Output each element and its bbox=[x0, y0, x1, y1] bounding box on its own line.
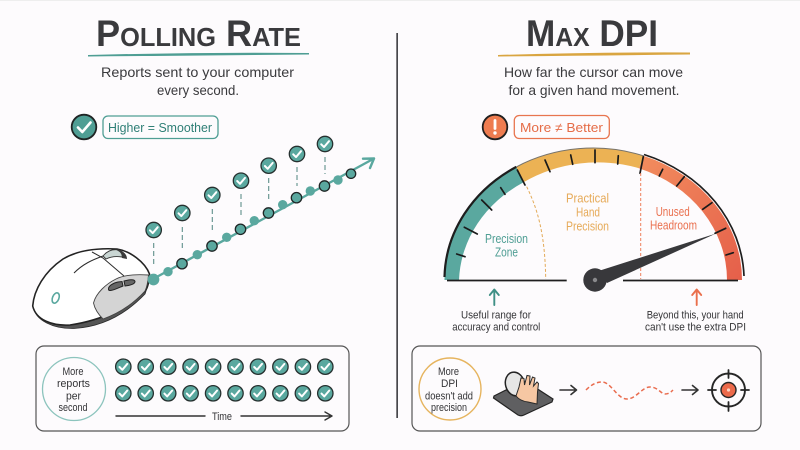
callout circle: doesn't add bbox=[425, 390, 473, 402]
subtitle: for a given hand movement. bbox=[508, 82, 680, 98]
needle bbox=[583, 234, 716, 292]
time arrow: Time bbox=[212, 411, 232, 423]
divider bbox=[396, 33, 398, 418]
trend line with arrow bbox=[153, 158, 374, 279]
label: Unused Headroom: Headroom bbox=[650, 218, 697, 232]
outer rim bbox=[444, 167, 516, 277]
title underline bbox=[498, 52, 690, 56]
title: Polling Rate: Polling Rate bbox=[96, 13, 301, 54]
label: Unused Headroom: Unused bbox=[656, 205, 690, 219]
label: Practical Hand Precision: Hand bbox=[576, 206, 600, 220]
small report dots bbox=[163, 175, 343, 276]
wavy cursor path bbox=[586, 382, 673, 399]
arrow: beyond range bbox=[692, 290, 701, 305]
callout circle bbox=[42, 358, 106, 420]
label: Practical Hand Precision: Practical bbox=[566, 192, 609, 206]
zone boundaries bbox=[527, 173, 641, 279]
label: Unused Headroom bbox=[650, 205, 697, 232]
subtitle bbox=[504, 64, 683, 98]
icon: target bbox=[708, 370, 749, 411]
badge: Higher = Smoother: Higher = Smoother bbox=[108, 120, 213, 135]
caption: useful range: Useful range for bbox=[461, 309, 531, 321]
label: Practical Hand Precision bbox=[566, 192, 609, 234]
subtitle: Reports sent to your computer bbox=[101, 64, 294, 80]
icon: computer mouse bbox=[33, 249, 150, 329]
label: Precision Zone bbox=[485, 232, 528, 260]
title underline bbox=[88, 53, 309, 56]
title: Max DPI: Max DPI bbox=[526, 13, 658, 54]
panel: max dpi heading bbox=[498, 13, 690, 98]
callout circle: More bbox=[62, 366, 84, 378]
time arrow bbox=[116, 411, 332, 423]
label: Practical Hand Precision: Precision bbox=[566, 220, 609, 234]
chart: dpi gauge bbox=[444, 148, 744, 292]
gauge zone: precision bbox=[444, 167, 524, 280]
callout circle: reports bbox=[57, 378, 90, 390]
callout circle: per bbox=[66, 390, 81, 402]
gauge zone: practical bbox=[516, 148, 644, 182]
gauge zone: headroom bbox=[639, 156, 742, 280]
badge: More ≠ Better: More ≠ Better bbox=[520, 120, 604, 135]
tick marks bbox=[457, 150, 733, 257]
icon: hand on mouse and pad bbox=[494, 370, 553, 416]
large report dots bbox=[148, 169, 356, 285]
callout circle: DPI bbox=[441, 378, 458, 390]
caption: useful range bbox=[452, 309, 540, 334]
check grid bbox=[116, 359, 333, 401]
caption: beyond range bbox=[645, 309, 746, 334]
dashed connectors bbox=[154, 157, 325, 266]
panel: more dpi does not add precision bbox=[412, 346, 761, 431]
label: Precision Zone: Zone bbox=[495, 246, 518, 260]
arrow: useful range bbox=[490, 290, 499, 305]
subtitle: How far the cursor can move bbox=[504, 64, 683, 80]
callout circle: second bbox=[58, 402, 88, 414]
panel: polling rate heading bbox=[88, 13, 309, 98]
caption: useful range: accuracy and control bbox=[452, 322, 540, 334]
arrow bbox=[682, 386, 698, 394]
callout circle bbox=[419, 358, 481, 420]
baseline bbox=[447, 280, 738, 282]
badge: Higher = Smoother bbox=[72, 115, 218, 139]
check marks bbox=[146, 136, 333, 238]
subtitle bbox=[101, 64, 294, 98]
caption: beyond range: can't use the extra DPI bbox=[645, 322, 746, 334]
arrow bbox=[560, 386, 576, 394]
caption: beyond range: Beyond this, your hand bbox=[647, 309, 744, 321]
badge: More ≠ Better bbox=[483, 115, 609, 139]
subtitle: every second. bbox=[157, 82, 239, 98]
chart: rising report timeline bbox=[146, 136, 374, 285]
callout circle: More bbox=[438, 366, 459, 378]
callout circle: precision bbox=[431, 402, 467, 414]
panel: more reports per second bbox=[36, 346, 349, 431]
label: Precision Zone: Precision bbox=[485, 232, 528, 246]
